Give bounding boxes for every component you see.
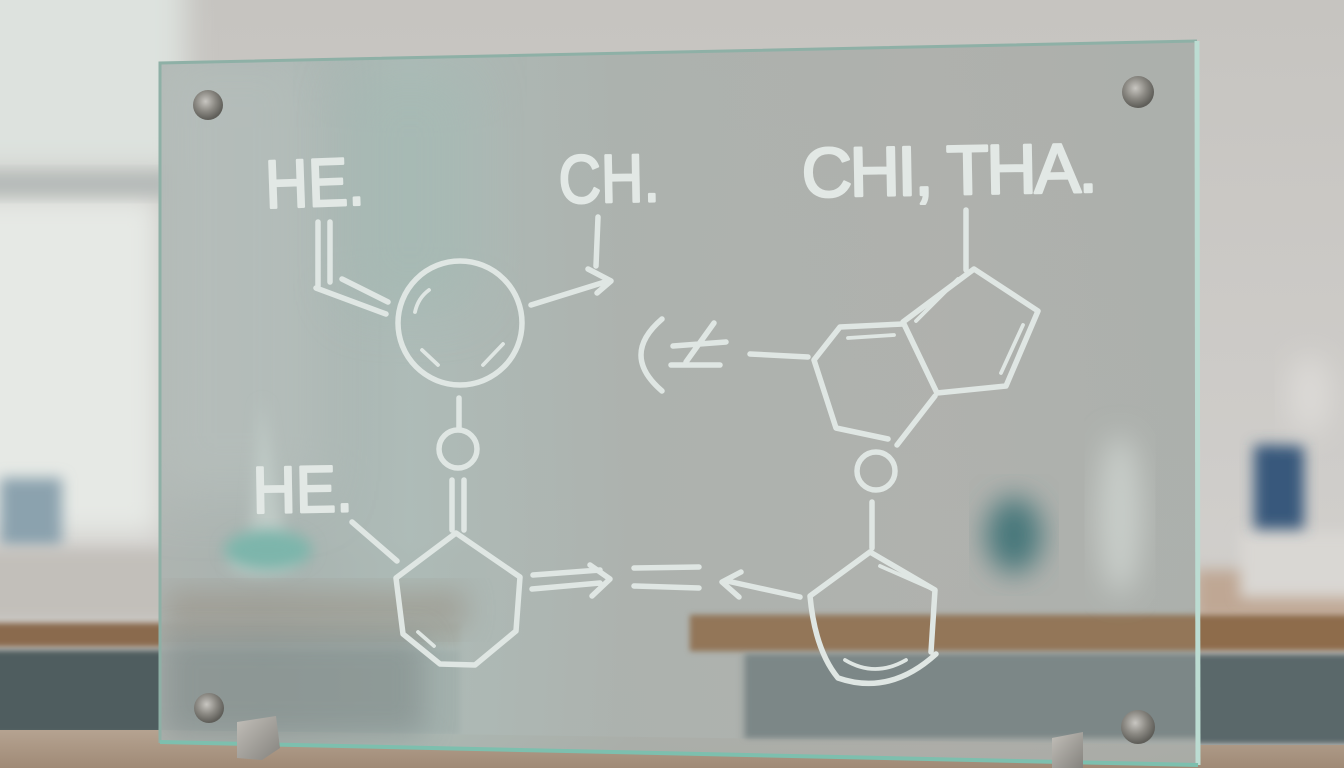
table top seen behind and beside the glass: [0, 730, 1344, 768]
bolts: [193, 76, 1155, 744]
glass edge: [160, 41, 1197, 743]
stand feet: [237, 716, 1083, 768]
label: CH.: CH.: [558, 140, 660, 218]
label: HE. top: HE.: [264, 144, 365, 223]
arrows: center reaction: [532, 565, 800, 597]
label: CHI, THA.: CHI, THA.: [801, 129, 1098, 212]
structure: fused rings upper right: [750, 210, 1038, 548]
symbol: bracket and not-equal: [641, 319, 726, 391]
label: HE. lower: HE.: [252, 451, 353, 527]
structure: lower right ring: [810, 552, 936, 683]
structure: lower left hexagon: [352, 480, 520, 665]
glass bottom edge: [160, 742, 1198, 765]
structure: upper left ring with bonds: [316, 217, 611, 468]
glass panel: [150, 40, 1210, 765]
